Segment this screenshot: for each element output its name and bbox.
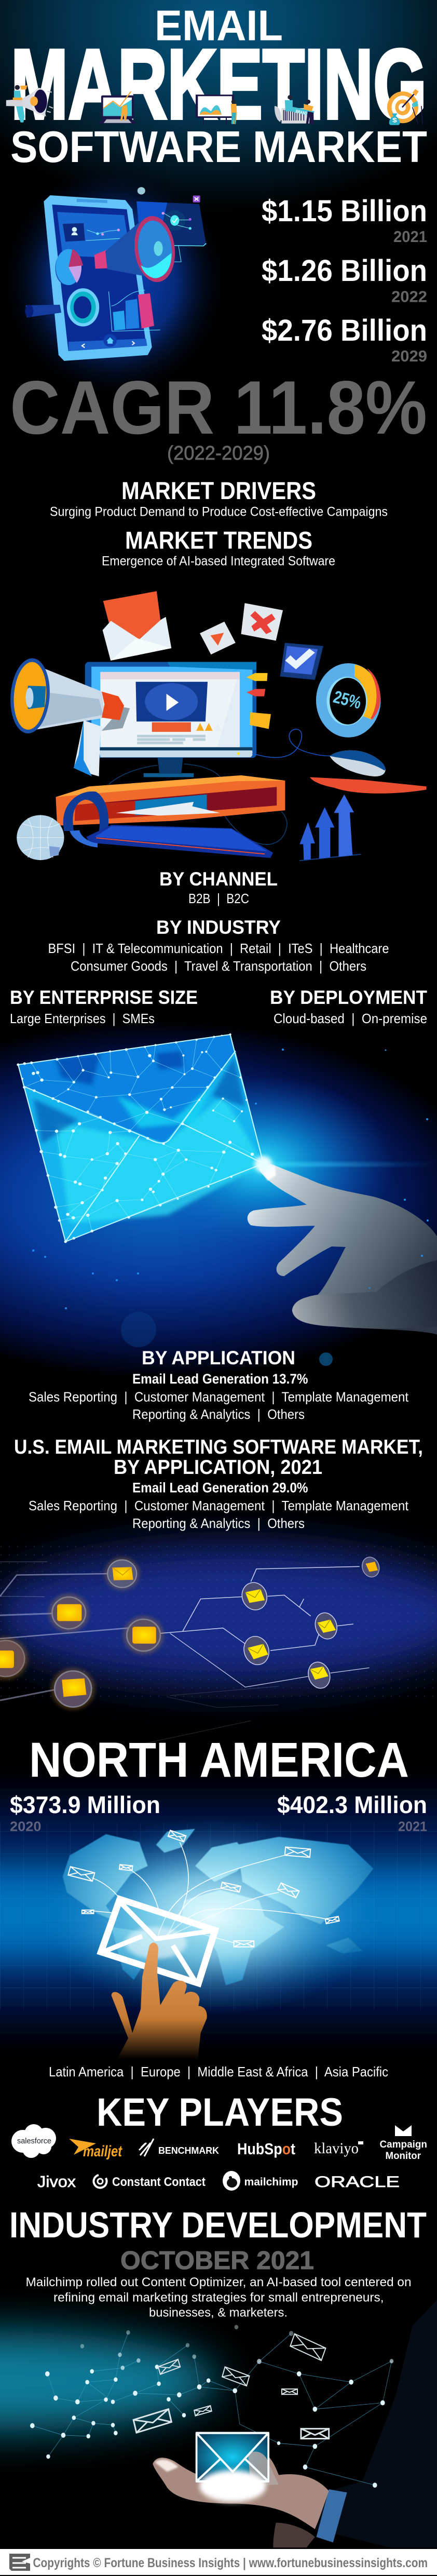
logo: Klaviyo: klaviyo — [314, 2140, 359, 2157]
logo: Campaign Monitor — [380, 2125, 427, 2162]
U.S. market by application: Reporting & Analytics | Others — [132, 1515, 305, 1531]
glowing email nodes — [0, 1555, 381, 1707]
panel: email node network background — [0, 1542, 437, 1745]
illustration: phone with megaphone — [0, 161, 228, 400]
logo: salesforce — [11, 2124, 56, 2158]
stat: North America 2020: 2020 — [10, 1819, 42, 1834]
by deployment: Cloud-based | On-premise — [274, 1011, 427, 1026]
network dots — [30, 2325, 393, 2488]
icon: brand tag with barcode: BRAND — [295, 109, 308, 116]
icon: presentation board with analyst — [196, 95, 237, 124]
title: Email Marketing Software Market: EMAIL — [155, 1, 283, 50]
title: Email Marketing Software Market — [10, 1, 427, 172]
market drivers — [50, 477, 388, 519]
world map continents — [63, 1829, 374, 1985]
large envelope — [101, 1899, 215, 1983]
North America heading: NORTH AMERICA — [29, 1733, 409, 1788]
panel: hand with email network — [0, 2300, 437, 2576]
by application: Email Lead Generation 13.7% — [132, 1371, 308, 1387]
logo: HubSpot: HubSpot — [237, 2140, 295, 2158]
by industry: BFSI | IT & Telecommunication | Retail | ITeS | Healthcare — [48, 941, 389, 956]
illustration: desktop marketing scene — [8, 591, 427, 861]
by deployment: BY DEPLOYMENT — [270, 987, 427, 1008]
market trends: Emergence of AI-based Integrated Software — [102, 554, 335, 568]
logo: mailjet: mailjet — [83, 2143, 123, 2160]
logo: Benchmark — [139, 2139, 219, 2156]
market drivers: MARKET DRIVERS — [121, 477, 316, 504]
development description: Mailchimp rolled out Content Optimizer, an AI-based tool centered on — [26, 2275, 411, 2289]
header panel — [0, 0, 437, 223]
icon: megaphone with person — [6, 85, 53, 123]
logo: Campaign Monitor: Monitor — [385, 2151, 421, 2162]
by channel: BY CHANNEL — [159, 868, 278, 890]
email icons — [68, 1830, 339, 1947]
logo: Mailchimp — [223, 2171, 298, 2191]
stat: 2029 value: $2.76 Billion — [262, 314, 427, 347]
key players heading: KEY PLAYERS — [97, 2090, 343, 2135]
key players logos — [11, 2124, 427, 2191]
logo: salesforce: salesforce — [17, 2137, 51, 2145]
keyboard — [70, 825, 273, 858]
stat: North America 2021 — [277, 1791, 427, 1834]
development description — [26, 2275, 411, 2319]
market trends — [102, 527, 335, 568]
network web — [24, 1037, 263, 1242]
market trends: MARKET TRENDS — [125, 527, 312, 554]
by enterprise size: BY ENTERPRISE SIZE — [10, 987, 198, 1008]
circuit lines — [0, 1562, 370, 1745]
hand pointing at envelope — [248, 1164, 437, 1334]
icon: Fortune Business Insights logo — [9, 2554, 30, 2571]
by application: Sales Reporting | Customer Management | Template Management — [29, 1389, 409, 1404]
floating email icons — [133, 2334, 329, 2438]
U.S. market by application: BY APPLICATION, 2021 — [114, 1456, 322, 1479]
icon: target with arrow and money bag — [387, 89, 422, 125]
panel: glowing network envelope — [0, 1013, 437, 1387]
by enterprise size — [10, 987, 198, 1026]
logo: Constant Contact: Constant Contact — [112, 2175, 206, 2189]
orange tray — [56, 764, 287, 844]
envelope icon — [103, 591, 171, 661]
by industry: BY INDUSTRY — [156, 917, 281, 938]
U.S. market by application: Sales Reporting | Customer Management | Template Management — [29, 1498, 409, 1513]
phone body — [44, 195, 152, 361]
development description: refining email marketing strategies for small entrepreneurs, — [53, 2290, 384, 2305]
growth arrows — [299, 795, 361, 861]
glowing main envelope — [197, 2433, 279, 2502]
pie chart — [55, 249, 83, 285]
development description: businesses, & marketers. — [149, 2306, 288, 2319]
envelope body — [18, 1035, 263, 1242]
donut 25%: 25% — [331, 688, 363, 713]
magnifier — [25, 288, 99, 327]
side panel with check — [136, 196, 206, 262]
U.S. market by application: Email Lead Generation 29.0% — [132, 1480, 308, 1496]
panel: world map with email network — [0, 1802, 437, 2059]
stat: 2029 value — [262, 314, 427, 365]
by industry — [48, 917, 389, 974]
megaphone — [94, 214, 179, 284]
by channel: B2B | B2C — [188, 891, 249, 906]
stat: 2021 value: $1.15 Billion — [262, 194, 427, 228]
stat: North America 2020 — [10, 1791, 160, 1834]
by application: Reporting & Analytics | Others — [132, 1406, 305, 1422]
logo: Constant Contact — [91, 2172, 206, 2190]
hand — [153, 2450, 329, 2547]
icon: brand tag with barcode — [275, 95, 315, 124]
footer bar — [0, 2549, 437, 2575]
logo: Mailchimp: mailchimp — [244, 2176, 298, 2188]
market drivers: Surging Product Demand to Produce Cost-effective Campaigns — [50, 505, 388, 519]
by enterprise size: Large Enterprises | SMEs — [10, 1011, 155, 1026]
logo: Benchmark: BENCHMARK — [158, 2145, 219, 2156]
icon cards — [200, 603, 323, 680]
date: October 2021: OCTOBER 2021 — [120, 2247, 314, 2275]
megaphone — [8, 657, 130, 776]
donut 25% — [316, 663, 381, 737]
node glow — [0, 1557, 163, 1710]
mouse and cable — [252, 729, 427, 794]
by channel — [159, 868, 278, 906]
stat: North America 2020: $373.9 Million — [10, 1791, 160, 1818]
mail paths — [92, 1842, 326, 1943]
icon: laptop with growth chart — [98, 91, 136, 124]
network nodes — [17, 1034, 254, 1243]
network links — [32, 2332, 391, 2485]
U.S. market by application — [14, 1436, 423, 1531]
logo: Jivox: Jivox — [37, 2172, 76, 2191]
by industry: Consumer Goods | Travel & Transportation | Others — [71, 958, 366, 974]
stat: 2022 value: $1.26 Billion — [262, 254, 427, 288]
CAGR headline: (2022-2029) — [167, 442, 270, 464]
pointing hand — [112, 1942, 207, 2059]
bar chart — [108, 290, 160, 331]
header icons: marketing people — [6, 85, 422, 125]
globe — [17, 815, 64, 860]
stat: 2021 value: 2021 — [393, 227, 427, 246]
stat: North America 2021: $402.3 Million — [277, 1791, 427, 1818]
logo: Oracle: ORACLE — [315, 2174, 400, 2191]
by application: BY APPLICATION — [142, 1347, 295, 1369]
icon: target with arrow and money bag: $ — [392, 117, 397, 124]
monitor — [85, 662, 271, 777]
other regions: Latin America | Europe | Middle East & Africa | Asia Pacific — [49, 2064, 388, 2079]
by deployment — [270, 987, 427, 1026]
stat: 2021 value — [262, 194, 427, 246]
stat: North America 2021: 2021 — [398, 1819, 427, 1834]
by application — [29, 1347, 409, 1422]
stat: 2029 value: 2029 — [391, 347, 427, 365]
logo: mailjet — [69, 2139, 123, 2160]
floating particles — [32, 1049, 429, 1309]
stat: 2022 value — [262, 254, 427, 305]
stat: 2022 value: 2022 — [391, 288, 427, 305]
business suit — [315, 2300, 437, 2547]
logo: Campaign Monitor: Campaign — [380, 2139, 427, 2150]
